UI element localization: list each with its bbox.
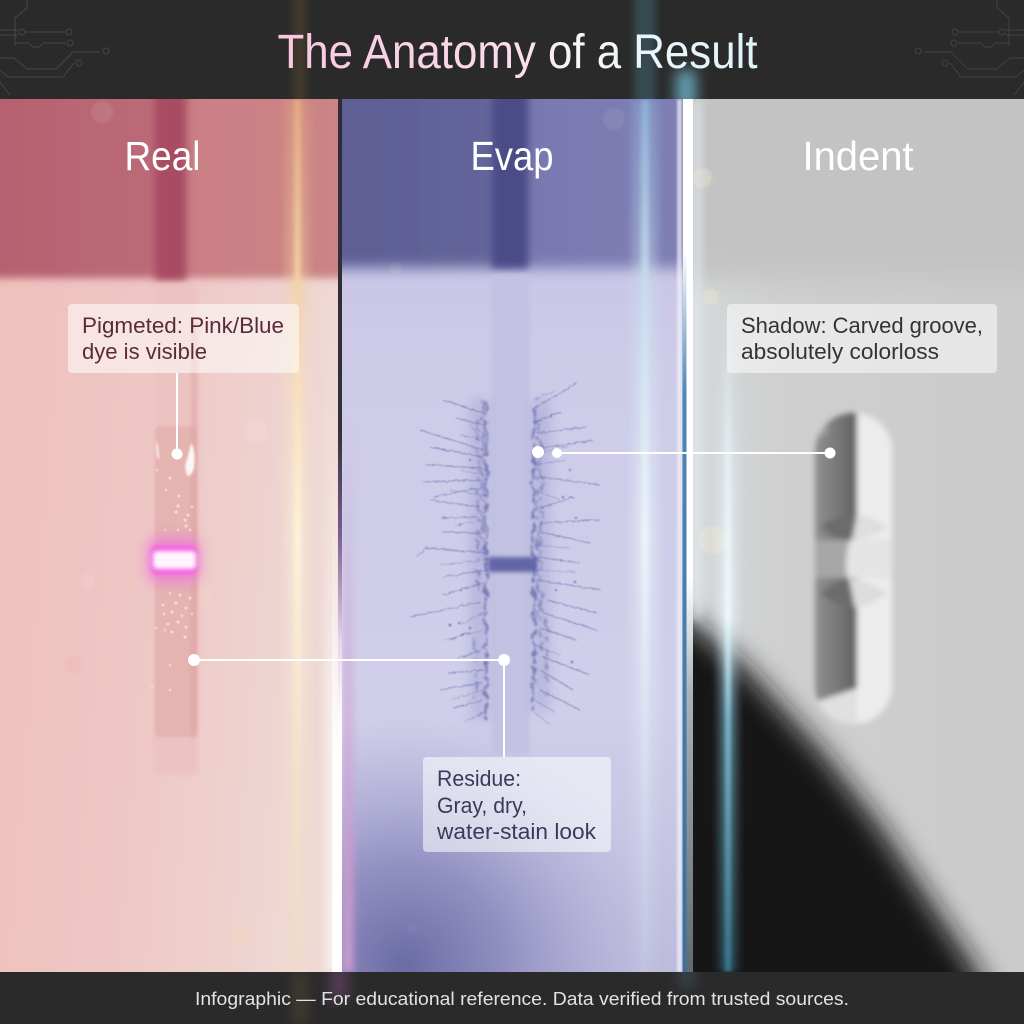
- panel divider and white streak: [325, 99, 353, 972]
- panel: Real: [0, 99, 338, 972]
- evap residue spines: [475, 400, 547, 720]
- panel: Indent: [693, 99, 1024, 972]
- connector: pigmented callout to strip: [172, 373, 182, 460]
- circuit decoration: top right: [915, 0, 1024, 95]
- real band groove: [155, 90, 186, 280]
- callout: residue: [423, 757, 611, 852]
- light streak: blue: [632, 99, 658, 972]
- callout: residue: water-stain look: [436, 819, 597, 844]
- light streak: pale teal: [718, 300, 738, 972]
- heading: Evap: Evap: [470, 133, 554, 179]
- header light glows: [293, 0, 696, 110]
- indent carved groove: [812, 409, 894, 725]
- connector: shadow across evap and indent: [532, 446, 836, 458]
- real top band: [0, 99, 338, 283]
- connector: residue across real and evap: [188, 654, 510, 757]
- callout: residue: Gray, dry,: [437, 793, 527, 818]
- real glitter specks: [151, 469, 193, 691]
- callout: residue: Residue:: [437, 766, 521, 791]
- callout: pigmented: Pigmeted: Pink/Blue: [82, 313, 284, 338]
- footer glow marks: [290, 972, 698, 1024]
- evap strip channel: [492, 338, 530, 752]
- indent background: [693, 255, 1024, 972]
- real positive pink line: [146, 536, 200, 584]
- evap residue fibers: [410, 383, 600, 725]
- circuit decoration: top left: [0, 0, 109, 95]
- real test strip channel: [153, 285, 198, 775]
- header background: [0, 0, 1024, 99]
- heading: Real: Real: [124, 133, 200, 179]
- evap band groove: [492, 90, 528, 268]
- footer bar: [0, 972, 1024, 1024]
- title: The Anatomy of a Result: [278, 26, 758, 79]
- indent dark shadow: [693, 599, 1002, 972]
- footer text: Infographic — For educational reference. Data verified from trusted sources.: [195, 989, 849, 1009]
- callout: pigmented: dye is visible: [82, 339, 207, 364]
- heading: Indent: Indent: [802, 133, 914, 179]
- evap soft residue halo: [479, 400, 541, 720]
- evap bokeh: [392, 110, 624, 267]
- callout: shadow: absolutely colorloss: [741, 339, 939, 364]
- real lower background: [0, 272, 338, 972]
- evap residue dots: [448, 459, 577, 664]
- light streak: bright cyan divider: [677, 99, 702, 972]
- light streak: amber: [285, 99, 309, 972]
- evap lower background: [342, 256, 683, 972]
- indent notches: [815, 540, 850, 578]
- evap faint line: [488, 557, 537, 572]
- callout: shadow: Shadow: Carved groove,: [741, 313, 983, 338]
- evap bottom shading: [342, 750, 608, 972]
- callout: shadow: [727, 304, 997, 373]
- indent top band: [693, 99, 1022, 283]
- panel: Evap: [342, 99, 683, 972]
- real bokeh: [92, 102, 112, 122]
- indent bokeh: [693, 168, 720, 553]
- callout: pigmented: [68, 304, 299, 373]
- evap top band: [342, 99, 683, 278]
